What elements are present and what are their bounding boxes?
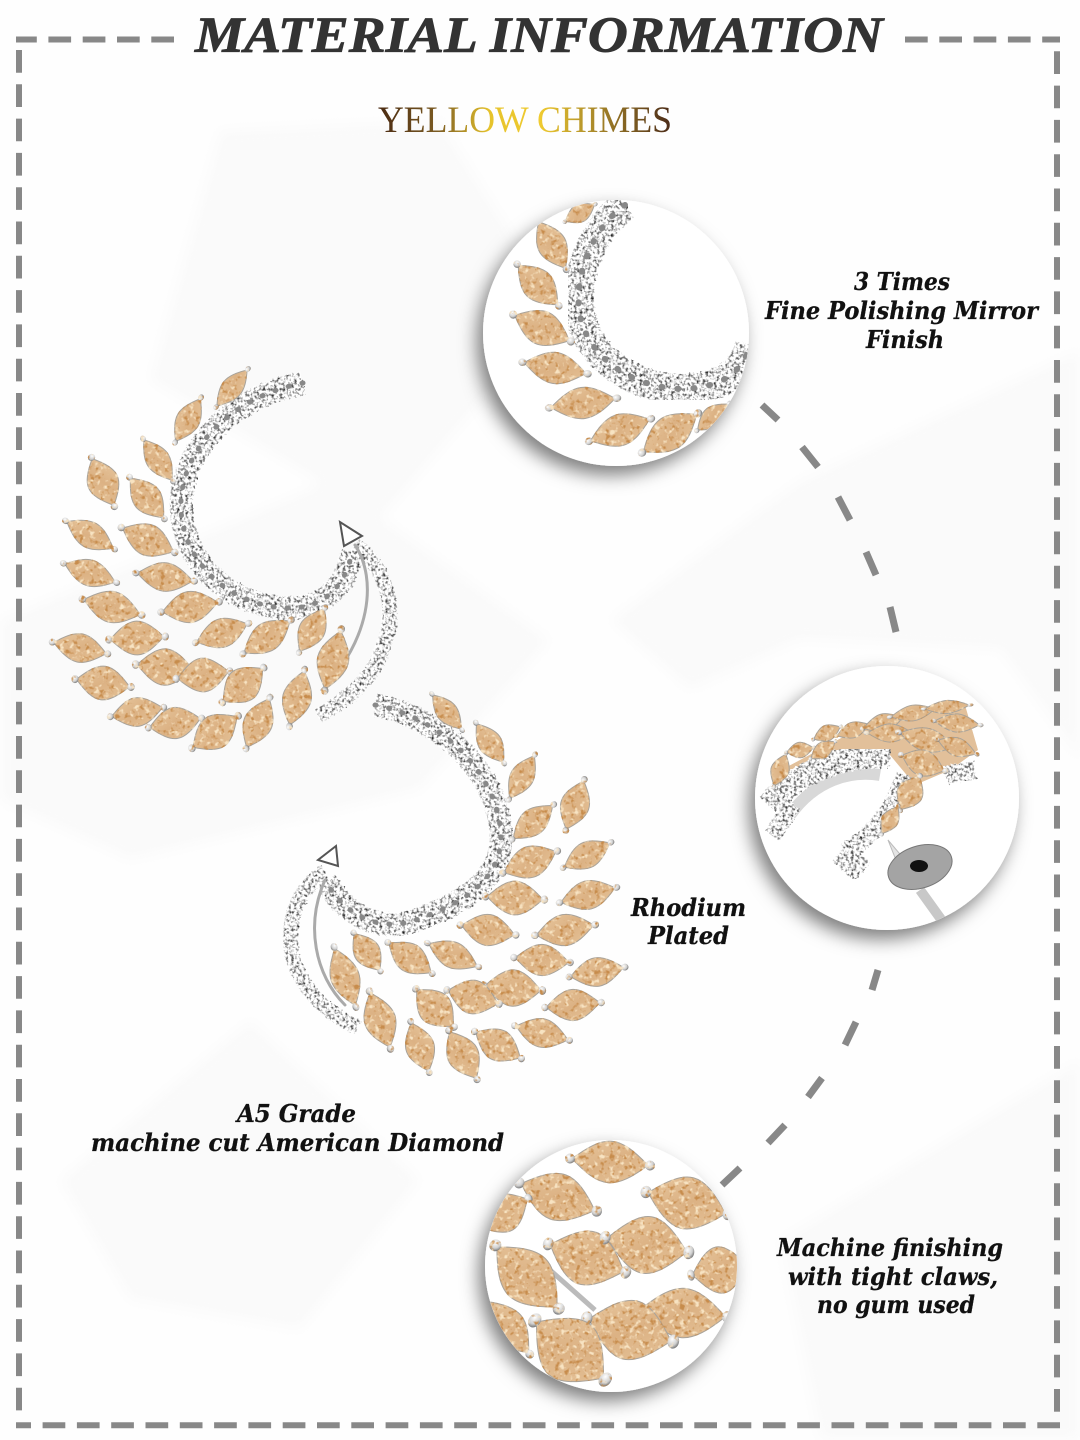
label: polishing: Finish (865, 325, 944, 354)
label: rhodium (630, 893, 746, 950)
label: polishing: 3 Times (854, 267, 950, 296)
zoom circle: claws close-up (464, 1137, 757, 1408)
label: polishing (764, 267, 1040, 354)
zoom circle: side view with post (755, 666, 1019, 930)
title: MATERIAL INFORMATION (194, 8, 885, 64)
zoom circle: polished finish (483, 195, 750, 469)
right earring (290, 685, 631, 1090)
label: machine finishing: with tight claws, (788, 1262, 998, 1291)
label: machine finishing: Machine finishing (776, 1233, 1003, 1262)
left earring (46, 360, 390, 764)
label: rhodium: Plated (647, 921, 729, 950)
label: diamond grade: machine cut American Diamond (91, 1128, 504, 1157)
label: diamond grade (91, 1099, 504, 1157)
label: polishing: Fine Polishing Mirror (764, 296, 1040, 325)
brand logo: YELLOW CHIMES (378, 100, 672, 141)
dashed connector arcs (722, 405, 896, 1185)
label: diamond grade: A5 Grade (235, 1099, 356, 1128)
label: rhodium: Rhodium (630, 893, 746, 922)
label: machine finishing (776, 1233, 1003, 1319)
label: machine finishing: no gum used (817, 1290, 975, 1319)
